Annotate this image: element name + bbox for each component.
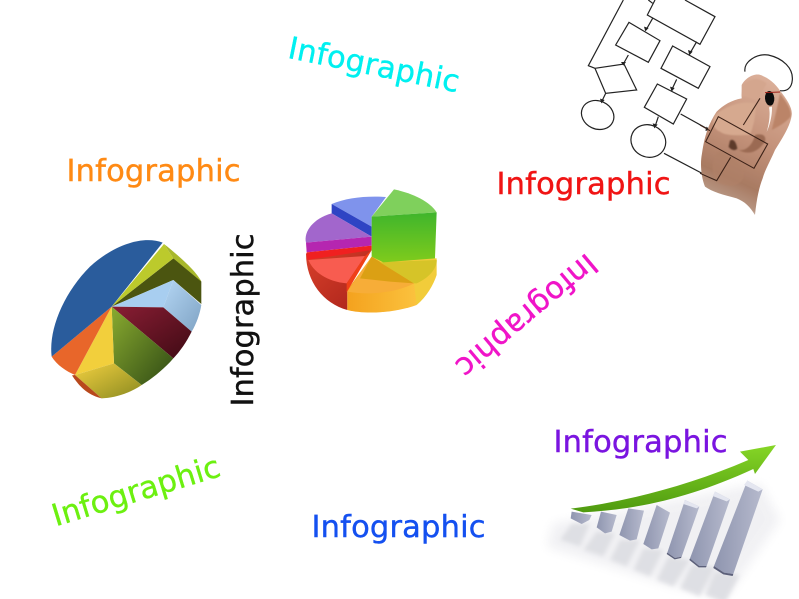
hand silhouette [701,74,792,215]
heading: magenta upside-down Infographic: Infographic [448,246,604,385]
slice: blue [332,197,386,227]
chart: tilted pie [51,240,201,398]
flowchart arrowheads [600,27,711,131]
slice: lime [112,244,173,307]
heading: red Infographic: Infographic [496,167,670,202]
slice: green raised [372,189,437,217]
green arrow [571,445,776,512]
slice: green [112,307,173,385]
slice: red [307,246,372,260]
bar reflections [547,483,780,599]
slice: light blue [112,280,173,307]
pen tip [764,91,775,106]
slice: dark olive [112,258,201,307]
slice: blue [51,240,163,357]
slice: yellow [380,260,437,283]
chart: rising bars with green arrow [547,445,780,599]
finger highlights and shadows [713,102,755,135]
heading: blue Infographic: Infographic [312,510,486,545]
heading: black vertical Infographic: Infographic [226,234,261,406]
heading: orange Infographic: Infographic [66,154,240,189]
slice: orange [347,257,414,293]
heading: purple Infographic: Infographic [554,425,728,460]
slice: yellow [75,307,114,375]
heading: cyan Infographic: Infographic [285,31,463,100]
slice: purple [306,213,372,243]
bars [571,481,763,576]
heading: lime Infographic: Infographic [48,450,225,534]
icon: hand drawing flowchart [577,0,792,174]
hand holding pen [700,74,792,215]
flowchart lines over hand [700,98,768,181]
slice: orange [52,307,112,375]
slice: maroon [112,307,192,358]
gap between pen and fingers [767,107,772,132]
pie base walls [306,250,372,310]
flowchart outline shapes [577,0,792,174]
chart: 3D glossy pie [306,189,437,313]
